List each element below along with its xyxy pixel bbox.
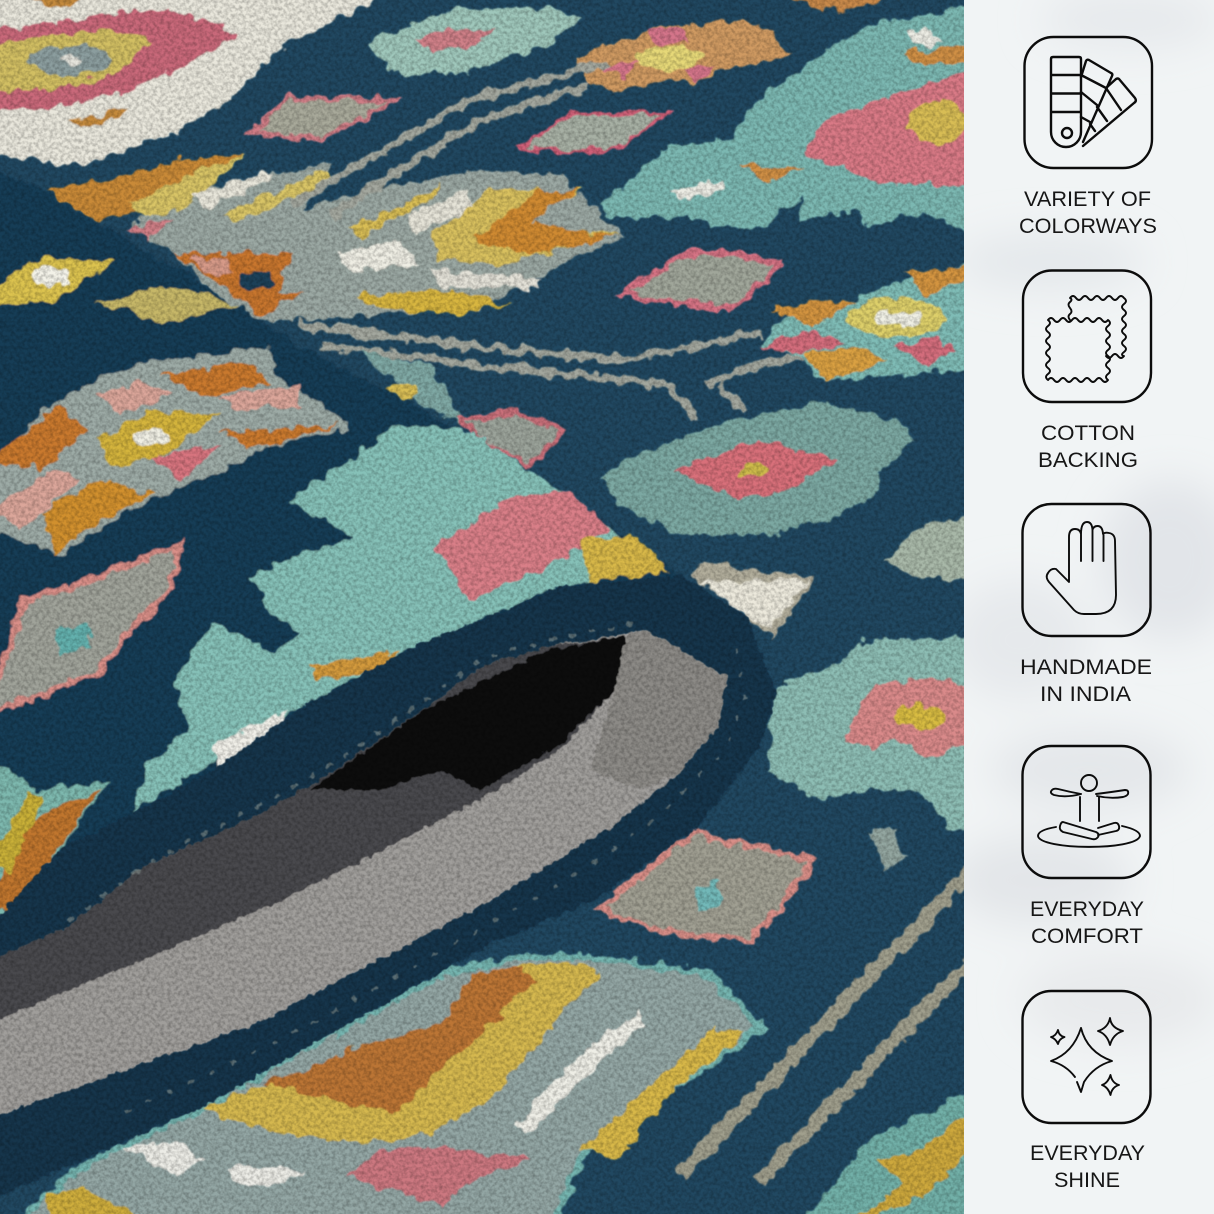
label: COLORWAYS xyxy=(1019,215,1157,238)
label: IN INDIA xyxy=(1040,683,1131,706)
floor rug motifs xyxy=(0,0,970,1214)
icon: meditating figure xyxy=(1022,746,1150,878)
label: SHINE xyxy=(1054,1169,1120,1192)
feature: everyday comfort xyxy=(1022,746,1150,948)
label: EVERYDAY xyxy=(1030,898,1144,921)
rolled rug top face xyxy=(0,167,680,950)
feature: cotton backing xyxy=(1023,270,1151,472)
label: COTTON xyxy=(1041,422,1135,445)
label xyxy=(1020,656,1152,706)
feature: variety of colorways xyxy=(1019,37,1157,238)
label: HANDMADE xyxy=(1020,656,1152,679)
rim fringe flecks xyxy=(70,622,745,1115)
label xyxy=(1030,1142,1145,1192)
yarn texture xyxy=(0,0,964,1214)
label xyxy=(1019,188,1157,238)
underside backing of roll xyxy=(0,630,727,1118)
label: BACKING xyxy=(1038,449,1138,472)
roll rim xyxy=(0,575,777,1200)
icon: colour swatch fan xyxy=(1024,37,1152,168)
label xyxy=(1038,422,1138,472)
label xyxy=(1030,898,1144,948)
photo: rolled rug xyxy=(0,0,970,1214)
feature: handmade in india xyxy=(1020,504,1152,706)
icon: hand xyxy=(1022,504,1150,636)
icon: sparkles xyxy=(1022,991,1150,1123)
icon: fabric squares xyxy=(1023,270,1151,402)
feature: everyday shine xyxy=(1022,991,1150,1192)
label: EVERYDAY xyxy=(1030,1142,1145,1165)
label: COMFORT xyxy=(1031,925,1143,948)
label: VARIETY OF xyxy=(1024,188,1151,211)
panel: feature sidebar xyxy=(950,0,1214,1214)
